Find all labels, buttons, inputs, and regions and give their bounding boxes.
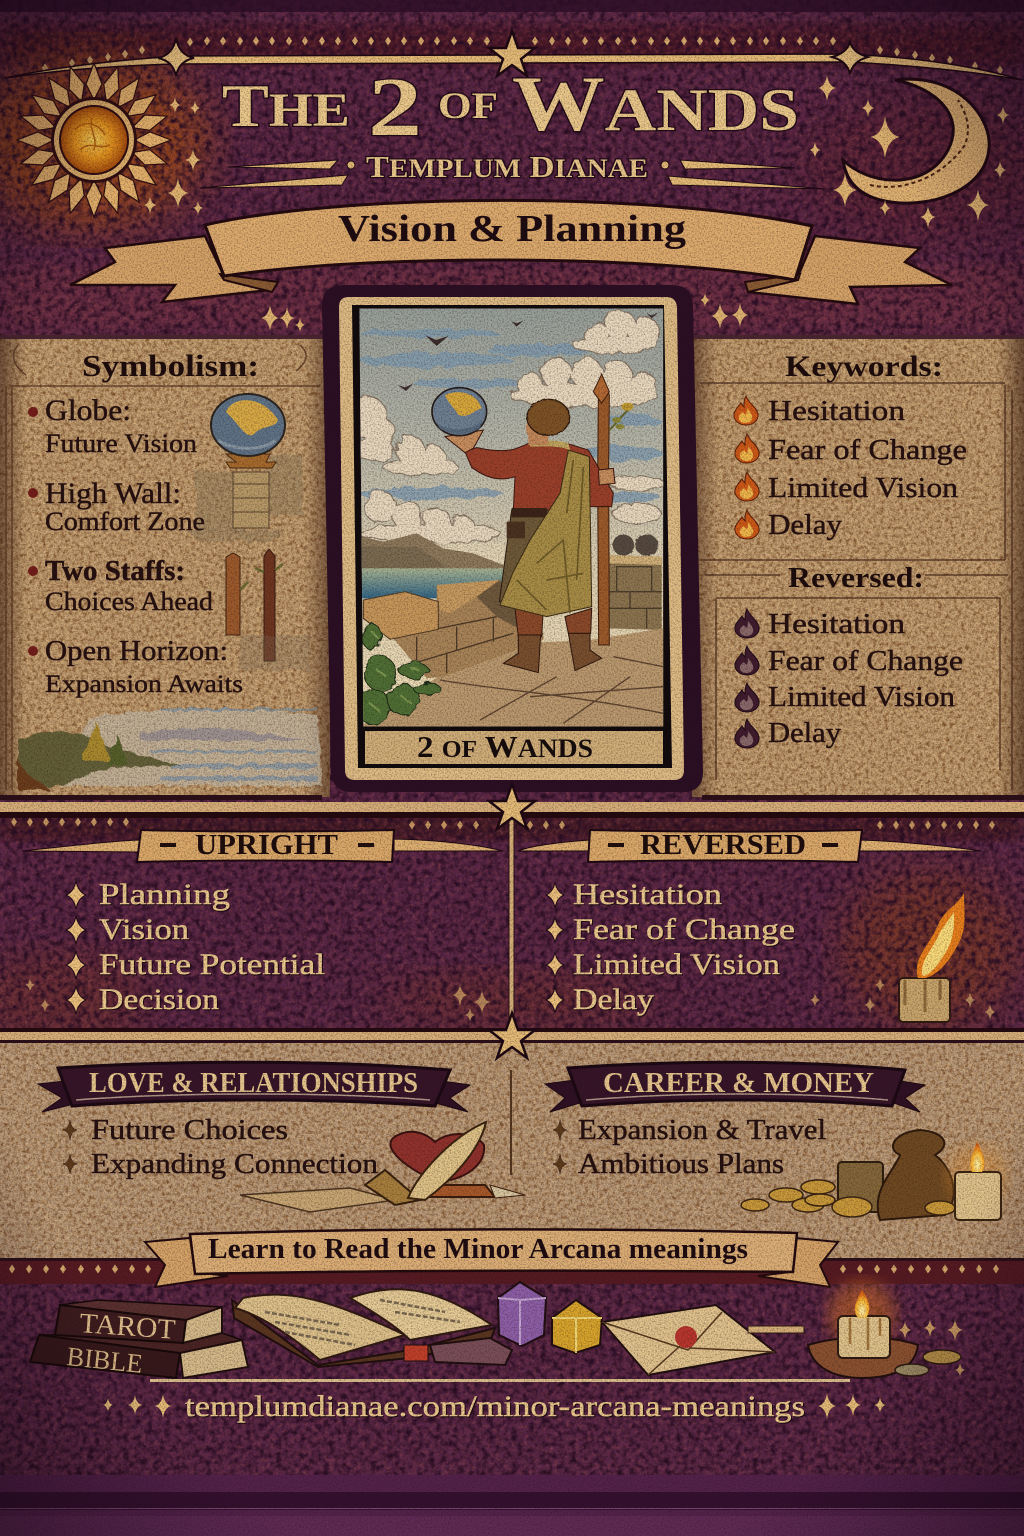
list: reversed meanings: Hesitation [573,878,722,911]
text: keywords list: Fear of Change [768,434,967,466]
text: symbolism list: Choices Ahead [45,587,213,616]
text: reversed keywords list: Fear of Change [768,646,963,677]
card illustration [347,308,663,727]
icon: heart, quill and letter [240,1122,525,1212]
text: keywords list [768,395,967,541]
list: reversed meanings: Limited Vision [573,948,780,981]
list: reversed meanings [546,878,795,1016]
website URL [103,1390,886,1423]
envelope with heart seal [602,1305,804,1375]
ribbon: upright: UPRIGHT [195,829,338,861]
list: reversed meanings: Delay [573,983,654,1016]
text: reversed keywords list: Limited Vision [768,682,955,713]
text: reversed keywords list: Hesitation [768,609,905,640]
banner: Vision & Planning: Vision & Planning [338,208,686,250]
text: symbolism list: Two Staffs: [45,555,185,587]
panel: symbolism [0,335,330,797]
illustration: globe on a high wall [185,394,303,542]
banner: Vision & Planning [70,200,952,304]
books: tarot and bible: TAROT [79,1308,176,1346]
icons: dark flames [735,609,759,748]
heading ribbon: love and relationships [38,1062,470,1112]
illustration: two staffs [226,549,310,670]
icons: orange flames [734,396,759,539]
list: career [553,1115,826,1180]
text: symbolism list: Open Horizon: [45,635,228,667]
heading ribbon: career and money: CAREER & MONEY [603,1068,874,1099]
books: tarot and bible: BIBLE [65,1341,144,1379]
ribbon: reversed: REVERSED [640,829,806,861]
panel: keywords and reversed [692,335,1024,797]
text: symbolism list: Globe: [45,394,131,427]
title: 2 [368,61,422,154]
icon: sun [17,63,171,217]
list: love [63,1115,378,1180]
shelf line [150,1379,850,1382]
subtitle: Templum Dianae: TEMPLUM DIANAE [366,149,648,184]
heading: reversed: Reversed: [788,562,924,594]
heading ribbon: love and relationships: LOVE & RELATIONSHIPS [89,1068,418,1099]
text: reversed keywords list: Delay [768,718,841,749]
icon: crescent moon and stars [809,75,1009,228]
title: THE [222,73,350,139]
list: upright meanings: Decision [99,983,219,1016]
text: symbolism list: High Wall: [45,477,181,510]
icon: coins, money bag and candle [741,1130,1007,1220]
books: tarot and bible [30,1300,248,1379]
title [222,60,799,154]
list: upright meanings: Future Potential [99,948,325,981]
crystals [404,1282,602,1365]
list: upright meanings [66,878,325,1016]
open book [232,1289,495,1367]
text: keywords list: Limited Vision [768,472,959,504]
list: career: Expansion & Travel [578,1115,826,1146]
icon: lit candle [899,893,965,1022]
text: reversed keywords list [768,609,963,749]
star divider [489,1013,535,1058]
banner: learn to read [145,1229,838,1287]
header ornament: diamond rows, top rule and stars [5,31,1022,80]
text: symbolism list [28,394,243,698]
list: love: Expanding Connection [91,1149,378,1180]
text: symbolism list: Expansion Awaits [45,671,243,698]
sparkles around the sun [144,97,748,332]
website URL: templumdianae.com/minor-arcana-meanings [185,1390,805,1423]
ribbon: upright [22,829,503,862]
list: upright meanings: Vision [99,913,189,946]
icon: candle in dish with coins [808,1281,965,1378]
text: keywords list: Delay [768,509,843,541]
title: OF [438,86,498,127]
ribbon: reversed [518,829,982,862]
banner: learn to read: Learn to Read the Minor Arcana meanings [208,1234,748,1265]
list: reversed meanings: Fear of Change [573,913,795,946]
text: symbolism list: Future Vision [45,429,197,458]
heading: keywords: Keywords: [785,350,943,383]
heading: symbolism: Symbolism: [82,348,259,383]
sparkles: middle band [25,978,996,1022]
title: WANDS [512,60,799,147]
heading ribbon: career and money [545,1062,925,1112]
panel: love and career parchment band [0,1028,1024,1262]
list: love: Future Choices [91,1115,288,1146]
tarot card [322,285,703,792]
lower band with diamonds [0,1258,1024,1284]
text: keywords list: Hesitation [768,395,906,427]
list: career: Ambitious Plans [578,1149,784,1180]
text: symbolism list: Comfort Zone [45,507,205,536]
subtitle: Templum Dianae [200,149,825,189]
card label: 2 OF WANDS [417,729,593,764]
section divider with star [0,784,1024,1020]
list: upright meanings: Planning [99,878,230,911]
illustration: open horizon landscape [18,708,322,790]
